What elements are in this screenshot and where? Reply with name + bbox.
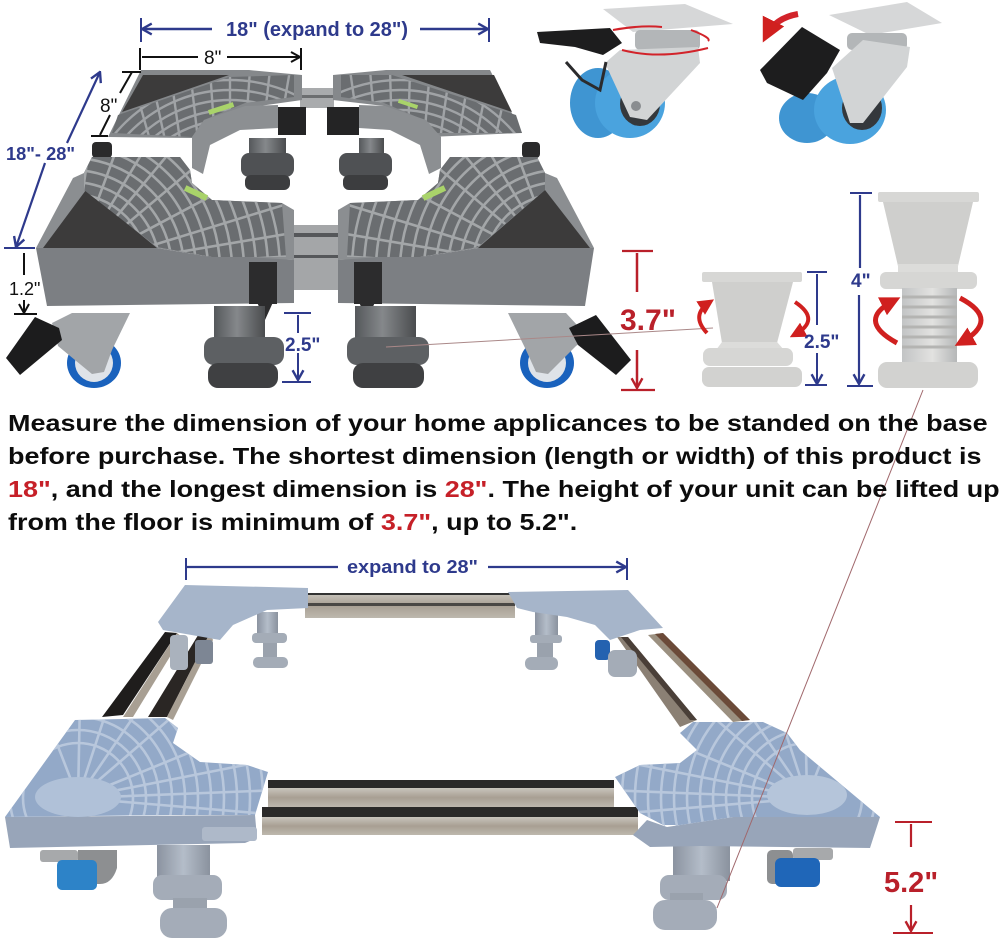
rear left foot: [252, 612, 288, 668]
dimension: expand to 28 inch: expand to 28": [347, 557, 478, 577]
right side wall: [338, 248, 594, 320]
front right corner plate: [338, 157, 594, 260]
front right foot: [653, 845, 730, 930]
leader line to 5.2 inch foot: [717, 390, 923, 908]
front left plate: [5, 718, 268, 848]
dimension: 4 inch tall foot: 4": [851, 271, 871, 292]
dimension: 2.5 inch foot: [282, 313, 320, 382]
right rails: [617, 633, 750, 727]
caster detail photo: left: [537, 4, 733, 138]
front left caster: [40, 850, 117, 890]
left caster: [6, 313, 130, 388]
left rails: [102, 632, 213, 720]
dimension: 2.5 inch short foot: [804, 272, 839, 385]
rear rail: [305, 593, 515, 618]
dimension: expand to 28 inch: [186, 557, 627, 580]
front left foot: [153, 845, 227, 938]
short foot illustration: [699, 272, 808, 387]
dimension: 18 to 28 inch depth: [4, 72, 100, 248]
dimension: 8 inch width: 8": [204, 48, 221, 69]
black bracket: [327, 107, 359, 135]
rear right adjustable foot: [339, 138, 392, 190]
description paragraph: 18", and the longest dimension is 28". The height of your unit can be lifted up: [8, 476, 1000, 502]
front right plate: [615, 722, 880, 848]
left side wall: [36, 248, 294, 320]
dimension: 2.5 inch short foot: 2.5": [804, 332, 839, 353]
dimension: 4 inch tall foot: [847, 193, 873, 386]
rear right plate: [508, 590, 663, 640]
dimension: 3.7 inch: 3.7": [620, 304, 676, 337]
green level left rear: [208, 102, 234, 115]
rear left hidden caster and foot: [170, 635, 213, 670]
description paragraph: [8, 410, 1000, 535]
front left corner plate: [36, 157, 294, 260]
description paragraph: Measure the dimension of your home applicances to be standed on the base: [8, 410, 988, 436]
description paragraph: from the floor is minimum of 3.7", up to 5.2".: [8, 509, 577, 535]
green level: [184, 185, 208, 201]
black bracket: [278, 107, 306, 135]
green level right rear: [398, 99, 418, 109]
rear left corner plate: [108, 70, 306, 174]
rear steel rails: [300, 88, 334, 108]
dimension: 8 inch depth: 8": [100, 96, 117, 117]
right caster: [508, 313, 631, 388]
rear right foot: [525, 612, 562, 670]
green level: [422, 185, 446, 201]
dimension: 1.2 inch: 1.2": [9, 279, 40, 299]
side clips behind front plates: [92, 142, 540, 158]
rear left adjustable foot: [241, 138, 294, 190]
dimension: 8 inch depth: [91, 72, 141, 136]
front right foot: [347, 306, 429, 388]
rear right corner plate: [327, 70, 522, 174]
arched wall: [359, 105, 441, 174]
dimension: 1.2 inch: [9, 253, 40, 314]
dimension: 18 inch expand to 28 inch: [141, 18, 489, 42]
dimension: 18 to 28 inch depth: 18"- 28": [6, 144, 75, 164]
dimension: 2.5 inch foot: 2.5": [285, 335, 320, 356]
front left foot: [204, 306, 284, 388]
middle steel rails: [292, 225, 340, 290]
rear right hidden caster and foot: [595, 640, 637, 677]
dimension: 8 inch width: [140, 48, 301, 70]
tall foot illustration: [875, 192, 981, 388]
dimension: 5.2 inch: 5.2": [884, 867, 938, 899]
dimension: 5.2 inch: [884, 822, 938, 933]
dimension: 3.7 inch: [620, 251, 676, 390]
product photo: expanded base: [5, 585, 880, 938]
leader line from foot to 3.7 inch mark: [386, 328, 713, 347]
front right caster: [767, 848, 833, 887]
arched wall: [192, 105, 278, 174]
front rails: [262, 780, 638, 835]
description paragraph: before purchase. The shortest dimension (length or width) of this product is: [8, 443, 981, 469]
caster detail photo: right: [760, 2, 942, 144]
product photo: compact base with casters: [6, 70, 631, 388]
dimension: 18 inch expand to 28 inch: 18" (expand to 28"): [226, 19, 408, 41]
rear left plate: [158, 585, 308, 640]
